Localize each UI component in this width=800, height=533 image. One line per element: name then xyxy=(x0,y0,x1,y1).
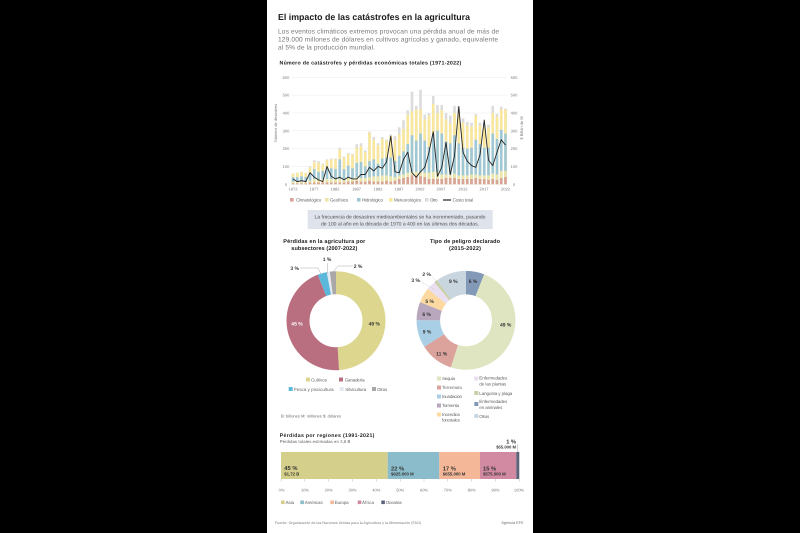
legend: Ganadería xyxy=(345,377,365,382)
bars: meteorological xyxy=(293,104,506,184)
percent axis: 90% xyxy=(491,488,500,492)
donut labels: 2 % xyxy=(354,264,363,270)
stacked bars: disasters per year xyxy=(293,90,506,184)
credit: Agencia EFE xyxy=(501,520,524,525)
line: total cost xyxy=(293,107,506,182)
legend: Pesca y piscicultura xyxy=(294,387,334,392)
heading xyxy=(283,238,366,252)
bars: geophysical xyxy=(293,171,506,184)
right axis: 200 xyxy=(511,146,518,151)
bar labels: 22 % xyxy=(391,466,404,472)
legend: Sequía xyxy=(442,376,455,381)
legend: Otros xyxy=(479,414,490,419)
chart legend: Otro xyxy=(430,198,438,203)
chart heading: Número de catástrofes y pérdidas económicas totales (1971-2022) xyxy=(280,60,461,66)
left axis: 500 xyxy=(283,93,290,98)
region legend: Asia xyxy=(286,500,294,505)
legend: Tormenta xyxy=(442,403,459,408)
donut labels: 9 % xyxy=(423,330,432,336)
legend: Langosta y plaga xyxy=(479,391,513,396)
heading: Pérdidas por regiones (1991-2021) xyxy=(280,433,375,439)
x axis years: 1997 xyxy=(395,186,404,192)
units note: B: billones M: millones $: dólares xyxy=(281,413,341,418)
donut labels: 45 % xyxy=(291,322,303,328)
donut labels: 6 % xyxy=(422,312,432,318)
intro text: al 5% de la producción mundial. xyxy=(278,44,375,52)
region legend: África xyxy=(362,500,374,505)
source: Fuente: Organización de las Naciones Unidas para la Agricultura y la Alimentación (FAO) xyxy=(275,521,421,525)
right axis: $ Billón de M xyxy=(519,116,524,140)
donut labels: 2 % xyxy=(422,272,432,278)
donut chart xyxy=(298,283,374,359)
percent axis: 50% xyxy=(396,488,405,492)
x axis years: 1977 xyxy=(310,186,319,192)
panel: hazard type xyxy=(411,239,513,422)
bars: other xyxy=(293,90,506,184)
x axis years: 1982 xyxy=(331,186,340,192)
chart legend: Geofísico xyxy=(330,198,349,203)
left axis: 400 xyxy=(283,110,290,116)
bar labels: $55.000 M xyxy=(496,444,517,450)
callout xyxy=(308,210,493,229)
intro text: Los eventos climáticos extremos provocan una pérdida anual de más de xyxy=(278,28,499,36)
subheading: Pérdidas totales estimadas en 3,8 B xyxy=(280,439,351,444)
x axis years: 2017 xyxy=(480,186,489,192)
x axis years xyxy=(289,186,511,192)
chart legend: Costo total xyxy=(452,198,473,203)
left axis: Número de desastres xyxy=(273,104,278,142)
left axis: 300 xyxy=(283,128,290,133)
right axis: 500 xyxy=(511,93,518,98)
heading xyxy=(430,239,501,252)
intro text xyxy=(278,28,499,52)
right axis: 300 xyxy=(511,128,518,133)
heading: Tipo de peligro declarado xyxy=(430,239,501,245)
percent axis: 80% xyxy=(468,488,476,492)
legend: Incendios xyxy=(442,412,461,417)
chart legend: Climatológico xyxy=(296,198,322,203)
panel: disasters and losses chart xyxy=(273,60,524,203)
right axis: 100 xyxy=(511,164,518,169)
region legend: Oceanía xyxy=(386,500,402,505)
intro text: 129.000 millones de dólares en cultivos agrícolas y ganado, equivalente xyxy=(278,36,498,44)
legend: forestales xyxy=(442,418,461,422)
bar labels: 45 % xyxy=(284,465,298,472)
donut labels: 3 % xyxy=(411,278,421,284)
percent axis xyxy=(279,479,525,492)
left axis: 600 xyxy=(283,75,290,80)
legend: Inundación xyxy=(442,394,462,399)
right axis: 500 xyxy=(511,75,518,80)
bar labels: $575.000 M xyxy=(483,472,506,476)
left axis: 200 xyxy=(283,146,290,151)
bar labels xyxy=(284,440,518,476)
panel: losses by region xyxy=(279,433,525,505)
bars: hydrological xyxy=(293,130,506,184)
x axis years: 2007 xyxy=(437,186,446,192)
stacked bar xyxy=(281,452,519,479)
background panel xyxy=(267,0,533,533)
left axis: 100 xyxy=(283,164,290,169)
left axis: 0 xyxy=(285,182,288,187)
x axis years: 2012 xyxy=(459,186,468,192)
bar labels: $1,72 B xyxy=(284,472,299,476)
x axis years: 2022 xyxy=(501,186,511,192)
legend: Enfermedades xyxy=(479,376,508,380)
donut labels: 6 % xyxy=(469,279,478,285)
x axis years: 2002 xyxy=(416,186,425,192)
title: El impacto de las catástrofes en la agricultura xyxy=(278,12,470,22)
legend: Cultivos xyxy=(311,377,328,382)
donut labels: 9 % xyxy=(449,279,458,285)
bar labels: $655.000 M xyxy=(443,472,466,476)
legend: Silvicultura xyxy=(345,387,367,392)
percent axis: 40% xyxy=(372,488,381,492)
bar labels: 17 % xyxy=(443,466,456,472)
callout: de 100 al año en la década de 1970 a 400 en las últimas dos décadas. xyxy=(321,222,479,228)
legend: de las plantas xyxy=(479,382,507,386)
donut labels: 11 % xyxy=(436,352,448,358)
bar labels: $825.000 M xyxy=(391,472,414,476)
donut labels: 49 % xyxy=(369,322,381,328)
chart legend: Meteorológico xyxy=(394,198,422,203)
callout: La frecuencia de desastres medioambientales se ha incrementado, pasando xyxy=(314,215,486,221)
right axis: 0 xyxy=(513,182,516,187)
bars: climatological xyxy=(293,175,506,184)
percent axis: 70% xyxy=(444,488,452,492)
donut labels: 5 % xyxy=(425,299,435,305)
percent axis: 60% xyxy=(420,488,428,492)
legend xyxy=(437,376,513,422)
donut labels: 1 % xyxy=(323,257,332,263)
region legend: Europa xyxy=(335,500,349,505)
bar labels: 1 % xyxy=(506,440,516,446)
donut labels xyxy=(411,272,512,358)
x axis years: 1972 xyxy=(289,186,298,192)
donut labels xyxy=(290,257,381,328)
region legend xyxy=(281,500,402,505)
right axis: 400 xyxy=(511,110,518,116)
chart legend xyxy=(290,198,473,203)
percent axis: 100% xyxy=(514,488,525,492)
legend: Enfermedades xyxy=(479,399,508,404)
panel: losses by subsector xyxy=(281,238,388,418)
heading: Pérdidas en la agricultura por xyxy=(283,238,366,245)
donut labels: 49 % xyxy=(500,322,512,328)
heading: subsectores (2007-2022) xyxy=(291,246,357,252)
left axis xyxy=(273,75,290,187)
bar labels: 15 % xyxy=(483,466,496,472)
percent axis: 30% xyxy=(348,488,357,492)
x axis years: 1992 xyxy=(374,186,383,192)
legend xyxy=(289,377,388,392)
legend: Otros xyxy=(377,387,388,392)
right axis xyxy=(511,75,524,187)
chart legend: Hidrológico xyxy=(362,198,383,203)
legend: en animales xyxy=(479,405,503,410)
donut chart xyxy=(428,283,504,358)
heading: (2015-2022) xyxy=(449,246,481,252)
percent axis: 20% xyxy=(325,488,333,492)
donut labels: 3 % xyxy=(290,266,300,272)
percent axis: 10% xyxy=(301,488,309,492)
percent axis: 0% xyxy=(279,488,285,492)
region legend: Américas xyxy=(305,500,323,505)
x axis years: 1987 xyxy=(352,186,362,192)
legend: Terremoto xyxy=(442,385,462,390)
